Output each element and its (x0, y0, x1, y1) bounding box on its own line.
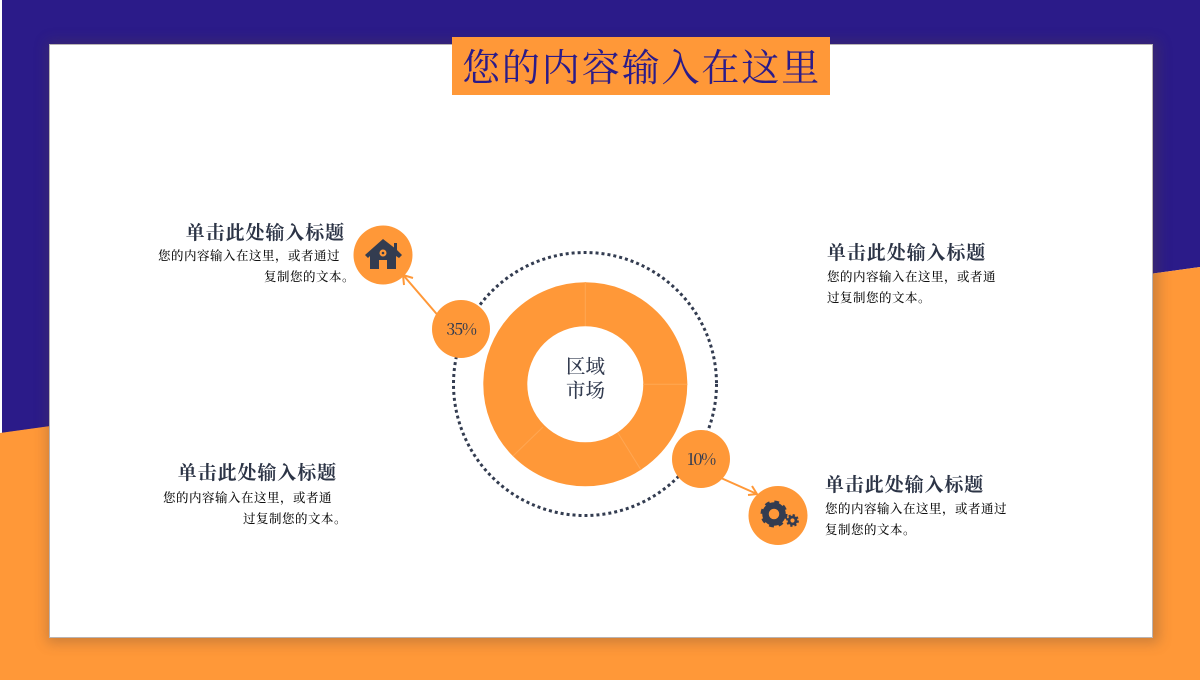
donut chart (505, 282, 688, 470)
badge: 35%: 35% (446, 317, 477, 340)
center label (566, 356, 605, 402)
title (452, 37, 830, 95)
arrow to gear icon (712, 474, 757, 495)
text block: top right: 单击此处输入标题 (827, 243, 986, 264)
text block: bottom right (825, 474, 1007, 537)
text block: top right: 您的内容输入在这里，或者通 (827, 270, 996, 284)
text block: top left (158, 222, 355, 284)
text block: bottom right: 复制您的文本。 (825, 523, 916, 537)
text block: top left: 复制您的文本。 (264, 270, 355, 284)
badge: 35% (432, 300, 490, 358)
badge: 10%: 10% (687, 447, 716, 470)
text block: top right (827, 242, 996, 305)
text block: bottom left: 单击此处输入标题 (178, 463, 337, 484)
arrow to home icon (403, 275, 441, 319)
title: 您的内容输入在这里 (462, 48, 821, 90)
text block: bottom right: 您的内容输入在这里，或者通过 (825, 502, 1007, 516)
icon: gears (748, 486, 808, 545)
center label: 区域 (566, 356, 605, 378)
text block: top right: 过复制您的文本。 (827, 291, 931, 305)
text block: bottom left: 过复制您的文本。 (243, 512, 347, 526)
text block: bottom right: 单击此处输入标题 (825, 475, 984, 496)
text block: bottom left (163, 462, 347, 526)
icon: house (354, 226, 412, 284)
dotted ring (454, 252, 716, 516)
text block: top left: 您的内容输入在这里，或者通过 (158, 249, 340, 263)
text block: top left: 单击此处输入标题 (186, 223, 345, 244)
center label: 市场 (566, 380, 605, 402)
badge: 10% (672, 430, 730, 488)
text block: bottom left: 您的内容输入在这里，或者通 (163, 491, 332, 505)
